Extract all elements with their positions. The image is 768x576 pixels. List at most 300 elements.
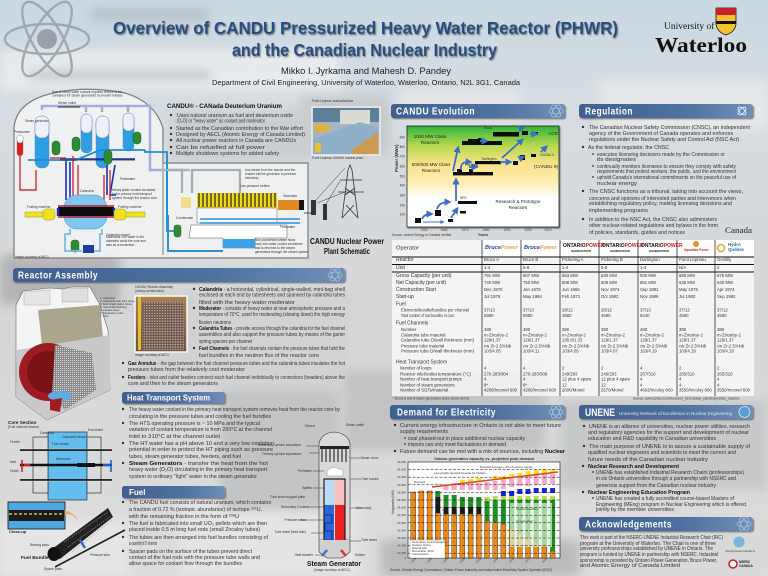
table: reactor comparison: Source: www.cameco.com/uranium_101/nuclear_electricity/candu_reactors xyxy=(633,396,740,400)
schematic callouts xyxy=(14,101,157,259)
chart region labels: ACR xyxy=(548,131,559,136)
chart: CANDU evolution: CANDU 6 xyxy=(540,153,554,157)
text block: reactor components: Moderator - consists of heavy water at near atmospheric pressure and a xyxy=(199,306,345,312)
column values: 103/4.05 xyxy=(562,348,579,354)
text block: heat transport: tubes, steam generator tubes, feeders, and fuel xyxy=(129,454,241,460)
axis labels: 700 xyxy=(400,154,405,158)
text block: Regulation: agency of the Government of Canada operates and enforces xyxy=(589,131,733,137)
column values: 37/13 xyxy=(523,308,534,312)
text block: fuel: allow space for coolant flow through the bundles xyxy=(129,561,242,567)
column values: 2 xyxy=(601,366,604,370)
column values: 103/4.07 xyxy=(601,348,618,354)
heading: Heat Transport System xyxy=(122,392,225,404)
row labels: Pressure tube D/wall thickness (mm) xyxy=(401,348,475,354)
text block: Regulation: executes licensing decisions made by the Commission or xyxy=(597,152,725,158)
chart region labels: (CANDU 9) xyxy=(534,164,559,170)
column values: 249/293 xyxy=(562,372,578,376)
diagram: steam generator: Tube sheet support plate xyxy=(270,495,305,499)
column values: cw Zr-2.5%Nb xyxy=(523,344,551,348)
row labels: Gross Capacity (per unit) xyxy=(396,273,452,279)
column values: 4 xyxy=(640,376,643,382)
caption: steam generator: (Image courtesy of AECL) xyxy=(314,568,350,572)
turbine hall: Non-condensed steam flows xyxy=(255,238,296,242)
demand axis: 34,000 xyxy=(397,468,406,472)
column values: 390 xyxy=(562,327,570,332)
text block: acknowledgements: sponsorship is provided by Ontario Power Generation, Bruce Power, xyxy=(580,558,717,564)
operator logos: GENERATION xyxy=(571,249,591,253)
row labels: Fuel xyxy=(396,302,406,308)
column values: Point Lepreau xyxy=(679,257,706,262)
logo: NSERC: CANADA xyxy=(739,564,754,568)
table: reactor comparison xyxy=(392,240,754,400)
text block: heat transport: The heavy water coolant in the primary heat transport system removes heat from the reactor core by xyxy=(129,407,340,413)
schematic callouts: Image courtesy of AECL xyxy=(15,255,50,259)
heading: Heat Transport System: Heat Transport System xyxy=(127,394,210,402)
schematic callouts: Moderator: the water in the xyxy=(106,235,144,239)
text block: reactor components: spring spacers per channel xyxy=(199,339,252,345)
text block: UNENE: future needs of the Canadian nuclear industry xyxy=(588,457,708,463)
column values: 129/1.37 xyxy=(601,338,618,342)
column values: Sep 1982 xyxy=(717,294,736,299)
x axis: 1950 xyxy=(420,228,428,232)
text block: acknowledgements: This work is part of the NSERC-UNENE Industrial Research Chair (IRC) xyxy=(580,535,723,541)
column values: 935 MW xyxy=(640,273,657,278)
heading: Demand for Electricity: Demand for Electricity xyxy=(397,408,496,418)
column values: 907 MW xyxy=(523,273,540,278)
year labels: 2005 xyxy=(426,556,433,564)
column values: Feb 1971 xyxy=(562,294,581,299)
column values: 4 xyxy=(717,382,720,388)
column values: 2 xyxy=(717,265,720,270)
title: and the Canadian Nuclear Industry xyxy=(232,40,497,60)
schematic callouts: to the primary heat transport xyxy=(112,192,152,196)
chart: CANDU evolution: Power (MWe) xyxy=(394,144,399,172)
operator logos: Aqualitas Power xyxy=(684,248,710,252)
text block: fuel: contact of the fuel rods with the pressure tube walls and xyxy=(129,555,260,561)
row labels xyxy=(396,246,475,392)
text block: demand: coal phased-out in place additional nuclear capacity xyxy=(408,436,525,442)
column values: 480 xyxy=(523,327,531,332)
column values: 5980 xyxy=(484,313,494,318)
illustration: reactor cutaway xyxy=(16,287,135,420)
heading: Demand for Electricity xyxy=(390,404,565,420)
column values: May 1975 xyxy=(679,287,698,292)
row labels: Number of SGTs/material xyxy=(400,388,448,392)
text block: UNENE: Nuclear Research and Development xyxy=(588,464,679,470)
column values: 1-4 xyxy=(562,265,569,270)
column values: 1-4 xyxy=(484,265,491,270)
text block: reactor components: fission neutrons xyxy=(199,320,231,326)
text block: CANDU intro: Designed by AECL (Atomic Energy of Canada Limited) xyxy=(176,132,305,138)
text block: reactor components: assemblies and also support the pressure tubes by means of the garter xyxy=(199,332,345,338)
text block: Regulation: In addition to the NSC Act, the CNSC also administers xyxy=(589,217,717,223)
text block: fuel: The CANDU fuel consists of natural uranium, which contains xyxy=(129,500,271,506)
column values: 4680 xyxy=(601,313,611,318)
photo: turbine hall xyxy=(312,99,380,160)
chart: CANDU evolution: Bruce xyxy=(484,126,493,130)
plant schematic title: CANDU Nuclear Power xyxy=(310,237,384,246)
diagram: steam generator: Secondary Coolant xyxy=(281,505,308,509)
column values: 129/1.37 xyxy=(523,338,540,342)
column values xyxy=(484,257,751,392)
diagram: steam generator: Shroud xyxy=(305,424,315,428)
logo: University of Waterloo: Waterloo xyxy=(655,33,747,57)
diagram: core section: Core Section xyxy=(8,420,37,425)
text block: UNENE: Nuclear Engineering Education Program xyxy=(588,490,690,496)
text block: heat transport xyxy=(122,407,340,480)
text block: heat transport: heavy water (D₂O) circulating in the primary heat transport xyxy=(129,467,267,473)
diagram: steam generator: Secondary xyxy=(356,506,372,510)
logo: University of Waterloo: University of xyxy=(664,21,715,32)
text block: UNENE: The main purpose of UNENE is to assure a sustainable supply of xyxy=(589,444,751,450)
text block: Regulation: continually monitors licensees to ensure they comply with safety xyxy=(597,164,736,170)
chart: CANDU evolution: NPD xyxy=(460,196,467,200)
text block: reactor components: fuel bundles in the neutron flux of the reactor core xyxy=(199,353,319,359)
text block: acknowledgements: university professorships established by UNENE in Ontario. The xyxy=(580,546,713,552)
row labels: Construction Start xyxy=(396,287,437,293)
schematic callouts: Steam outlet xyxy=(58,101,76,105)
axis labels: 100 xyxy=(400,212,405,216)
legend: Generation Source/Capacity xyxy=(412,540,448,544)
fuelling machines xyxy=(25,209,145,220)
text block: demand: Current energy infrastructure in Ontario is not able to meet future xyxy=(400,423,561,429)
schematic callouts: Fueling machine xyxy=(118,205,142,209)
x axis: 1980 xyxy=(482,228,490,232)
chart: CANDU evolution xyxy=(392,126,559,237)
text block: acknowledgements: program is funded by UNENE in partnership with NSERC. Industrial xyxy=(580,552,718,558)
logo: NSERC xyxy=(729,560,754,568)
turbine hall: Condensate xyxy=(176,216,193,220)
gridlines xyxy=(408,470,560,553)
year labels: 2019 xyxy=(541,556,548,564)
photo: turbine hall: Point Lepreau CANDU nuclear plant xyxy=(312,156,363,160)
turbine hall: Use steam from the reactor and the xyxy=(245,168,295,172)
chart: CANDU evolution: Pickering xyxy=(465,163,478,167)
column values: 129/1.37 xyxy=(640,338,657,342)
turbine hall: and is returned to the steam xyxy=(255,246,295,250)
column values: cw Zr-2.5%Nb xyxy=(601,344,629,348)
illustration: reactor cutaway: 5. Feeder pipes xyxy=(100,308,120,312)
text block: fuel: Spacer pads on the surface of the tubes prevent direct xyxy=(129,549,252,555)
text block: heat transport: The HT water has a pH above 10 and a very low oxidation xyxy=(129,441,274,447)
chart: Ontario demand and capacity: Ontario generation capacity vs. projected peak demand xyxy=(434,457,535,461)
diagram: steam generator: Heat transfer xyxy=(295,553,314,557)
column values: 103/4.05 xyxy=(484,348,501,354)
diagram: core section: Calandria xyxy=(40,431,54,435)
text block: heat transport: inlet to 310°C at the channel outlet xyxy=(129,434,221,440)
column values: 380 xyxy=(679,327,687,332)
diagram: steam generator: Pressure tubes xyxy=(285,518,306,522)
transformer xyxy=(311,200,327,220)
heading: UNENE: UNENE xyxy=(585,407,615,419)
column values: Jan 1978 xyxy=(523,287,541,292)
column values: 380 xyxy=(717,327,725,332)
row labels: Elements/bundle/bundles per channel xyxy=(401,308,469,312)
column values: 103/4.11 xyxy=(523,348,540,354)
text block: CANDU intro: Started as the Canadian contribution to the War effort xyxy=(176,126,303,132)
column values: 12 plus 4 spare xyxy=(562,376,592,382)
chart annotations: Demand forecast + 1% of reserve margin xyxy=(480,465,533,469)
text block: UNENE xyxy=(582,424,751,513)
legend: Nuclear, Hydro xyxy=(412,543,431,547)
text block: UNENE: UNENE has established Industrial Research Chairs (professorships) xyxy=(596,470,744,476)
text block: fuel: an assembly of 37 elements xyxy=(129,541,157,547)
axis labels: 800 xyxy=(400,145,405,149)
text block: reactor components: Feeders - inlet and outlet feeders connect each fuel channel individually to connectors (headers) above the xyxy=(128,375,345,381)
authors: Mikko I. Jyrkama and Mahesh D. Pandey xyxy=(281,66,452,76)
column values: 635 MW xyxy=(679,280,696,285)
turbine hall: back into water-cooled condenser xyxy=(255,242,304,246)
column values: 37/13 xyxy=(484,308,495,312)
text block: reactor components: filled with the heavy water moderator xyxy=(199,300,295,306)
x axis xyxy=(420,228,552,237)
schematic callouts: Pressurizer xyxy=(14,130,31,134)
operator logos: ONTARIOPOWER xyxy=(602,243,644,249)
column values: 791 MW xyxy=(484,273,501,278)
column values: Jun 1966 xyxy=(562,287,580,292)
column values: 750 MW xyxy=(523,280,540,285)
axis labels: 900 xyxy=(400,136,405,140)
heading: Acknowledgements xyxy=(579,516,753,532)
text block: reactor components: pressure tubes from the relatively cool moderator xyxy=(128,367,245,373)
caption: steam generator: Steam Generator xyxy=(307,561,361,568)
operator logos: ONTARIOPOWER xyxy=(563,243,605,249)
schematic callouts: Heavy water coolant circulates xyxy=(112,188,156,192)
row labels: Total number of fuel bundles in core xyxy=(401,313,454,318)
text block: acknowledgements xyxy=(580,535,723,569)
column values: 130.8/1.33 xyxy=(562,338,583,342)
demand axis: 28,000 xyxy=(397,490,406,494)
demand axis: 26,000 xyxy=(397,498,406,502)
demand axis: 20,000 xyxy=(397,521,406,525)
column values: 4560 xyxy=(679,313,689,318)
illustration: reactor cutaway: 1. Calandria xyxy=(100,296,116,300)
heading: Reactor Assembly: Reactor Assembly xyxy=(18,270,98,282)
column values: 12 xyxy=(562,382,567,388)
text block: reactor components: Calandria Tubes - provide access through the calandria for the fuel channel xyxy=(199,326,345,332)
text block: demand: Future demand can be met with a mix of sources, including Nuclear xyxy=(400,449,566,455)
evolution arrows xyxy=(422,128,546,222)
axis labels: 500 xyxy=(400,174,405,178)
schematic callouts: Feedwater xyxy=(120,177,136,181)
column values: Jul 1982 xyxy=(679,294,696,299)
turbine hall: reactor turbine generator to produce xyxy=(245,172,296,176)
column values: Jul 1978 xyxy=(484,294,501,299)
chart region labels: Reactors xyxy=(422,168,441,173)
column values: N/A xyxy=(679,265,686,270)
column values: 508 MW xyxy=(562,280,579,285)
diagram: core section: Calandria Vessel xyxy=(62,435,86,439)
illustration: reactor cutaway: 6. Moderator outlet xyxy=(100,311,124,315)
text block: reactor components: Fuel Channels - the fuel channels contain the pressure tubes that hold the xyxy=(199,346,345,352)
diagram: steam generator: Baffles xyxy=(302,486,312,490)
plant schematic title xyxy=(310,237,384,256)
text block: UNENE: UNENE is an alliance of universities, nuclear power utilities, research xyxy=(589,424,750,430)
calandria xyxy=(64,195,107,229)
column values: 12 xyxy=(601,382,606,388)
text block: Regulation: uphold Canada's international commitments on the peaceful use of xyxy=(597,175,736,181)
column values: cw Zr-2.5%Nb xyxy=(679,344,707,348)
photo: calandria face: CANDU Reactor Assembly xyxy=(135,285,173,289)
column values: 4 xyxy=(640,366,643,370)
text block: CANDU intro: Multiple shutdown systems for added safety xyxy=(176,151,279,157)
column values: 4680 xyxy=(562,313,572,318)
text block: reactor components xyxy=(122,287,345,387)
text block: fuel: The fuel is fabricated into small UO₂ pellets which are then xyxy=(129,521,267,527)
column values: 4200/Inconel 600 xyxy=(484,388,518,392)
schematic callouts: Calandria vessel xyxy=(106,233,130,237)
column values: Bruce A xyxy=(484,257,499,262)
column values: m-Zircaloy-2 xyxy=(640,332,664,338)
logo: Canada wordmark: Canada xyxy=(725,225,752,235)
column values: 6240 xyxy=(640,313,650,318)
column values: 265/310 xyxy=(717,372,733,376)
text block: Regulation: implementing programs xyxy=(589,208,648,214)
column values: 2570/Monel xyxy=(601,388,624,392)
text block: reactor components: core and then to the steam generators xyxy=(128,381,218,387)
column values: Sep 1981 xyxy=(640,287,659,292)
text block: Regulation: other nuclear-related regulations and bylaws in the form xyxy=(589,223,718,229)
diagram: core section: (Fuel channel reactor) xyxy=(8,425,39,429)
column values: Nov 1989 xyxy=(640,294,659,299)
illustration: fuel bundle: Pressure tube xyxy=(90,553,110,557)
demand axis: 30,000 xyxy=(397,483,406,487)
schematic callouts: acts as a moderator. xyxy=(106,243,135,247)
text block: reactor components: enclosed at each end by tubesheets and spanned by calandria tubes xyxy=(199,292,345,298)
text block: reactor components: Calandria - a horizontal, cylindrical, single-walled, mini-bag shell xyxy=(199,287,345,293)
logo: UNENE xyxy=(725,536,755,553)
text block: heat transport: system to ordinary "light" water in the steam generator xyxy=(129,474,257,480)
row labels: Number of heat transport pumps xyxy=(400,376,462,382)
column values: 28/12 xyxy=(562,308,573,312)
chart: Ontario demand and capacity xyxy=(390,457,560,572)
year labels: 2017 xyxy=(524,556,531,564)
column values: 563 MW xyxy=(562,273,579,278)
illustration: fuel bundle: Spacer pads xyxy=(44,567,62,571)
column values: 4 xyxy=(679,382,682,388)
axis labels xyxy=(400,136,405,216)
column values: 4560 xyxy=(717,313,727,318)
column values: 249/293 xyxy=(601,372,617,376)
diagram: steam generator: Tube sheet (feed side) xyxy=(274,530,306,534)
demand axis: 16,000 xyxy=(397,536,406,540)
column values: m-Zircaloy-2 xyxy=(523,332,547,338)
axis labels: 400 xyxy=(400,184,405,188)
column values: 480 xyxy=(640,327,648,332)
plant schematic title: Plant Schematic xyxy=(324,247,370,256)
demand line xyxy=(432,472,558,487)
diagram: core section: Outlet xyxy=(10,469,19,473)
column values: 270-283/304 xyxy=(484,372,509,376)
demand axis: 18,000 xyxy=(397,528,406,532)
x axis: 1990 xyxy=(503,228,511,232)
chart: CANDU evolution: Darlington xyxy=(482,157,497,161)
row labels: Heat Transport System xyxy=(396,360,447,366)
row labels: Unit xyxy=(396,265,406,271)
chart: CANDU evolution: Source: Atomic Energy of Canada Limited xyxy=(392,233,451,237)
column values: 2 xyxy=(717,366,720,370)
turbine hall: generators through the closed system xyxy=(255,250,309,254)
chart annotations xyxy=(414,465,539,523)
turbine hall: electricity. xyxy=(245,176,259,180)
column values: 129/1.37 xyxy=(679,338,696,342)
demand axis: 0 xyxy=(404,556,406,560)
diagram: steam generator xyxy=(258,423,379,558)
text block: UNENE: education and R&D capability in Canadian universities xyxy=(588,436,716,442)
containment and turbine hall outline xyxy=(14,89,308,258)
pumps xyxy=(52,132,141,252)
demand axis xyxy=(397,460,406,560)
column values: m-Zircaloy-2 xyxy=(562,332,586,338)
column values: 4663/Incoloy 800 xyxy=(640,388,673,392)
text block: Regulation: As the federal regulator, the CNSC xyxy=(588,145,669,151)
column values: 103/4.19 xyxy=(717,348,734,354)
column values: 508 MW xyxy=(601,280,618,285)
column values: 267/310 xyxy=(640,372,656,376)
affiliation: Department of Civil Engineering, University of Waterloo, Waterloo, Ontario, N2L 3G1, Canada xyxy=(212,78,521,87)
column values: m-Zircaloy-2 xyxy=(717,332,741,338)
column values: 5-8 xyxy=(523,265,530,270)
column values: m-Zircaloy-2 xyxy=(679,332,703,338)
column values: 37/13 xyxy=(640,308,651,312)
text block: heat transport: Steam Generators - transfer the heat from the hot xyxy=(129,461,269,467)
chart region labels xyxy=(412,131,559,210)
column values: 3550/Inconel 600 xyxy=(717,388,751,392)
text block: Regulation: regulations under the Nuclear Safety and Control Act (NSC Act) xyxy=(589,137,739,143)
chart annotations: Gas/Renewables xyxy=(516,507,539,511)
caption: steam generator xyxy=(307,561,361,572)
photo: calandria face: Image courtesy of AECL xyxy=(135,353,170,357)
chart: Ontario demand and capacity: Source: Ontario Energy Commission, Ontario Power Authority and Independent Electricity System Operator (IESO) xyxy=(390,568,552,572)
row labels: Number xyxy=(401,327,417,332)
column values: 1-4 xyxy=(640,265,647,270)
year labels: 2003 xyxy=(410,556,417,564)
row labels: Net Capacity (per unit) xyxy=(396,280,446,286)
illustration: fuel bundle: Bearing pads xyxy=(30,543,49,547)
column values: cw Zr-2.5%Nb xyxy=(562,344,590,348)
diagram: close-up xyxy=(8,502,78,534)
heading: UNENE xyxy=(579,405,753,419)
title xyxy=(113,18,618,60)
operator logos: BrucePower xyxy=(485,245,518,251)
column values: 37/12 xyxy=(679,308,690,312)
chart annotations: Demand xyxy=(414,480,425,484)
year labels: 2015 xyxy=(508,556,515,564)
text block: fuel: placed inside 0.5 m long fuel rods (small Zircaloy tubes) xyxy=(129,527,260,533)
text block: Regulation: its designates xyxy=(597,157,636,163)
column values: 2 xyxy=(679,366,682,370)
text block: reactor components: Gas Annulus - the gap between the fuel channel pressure tubes and the calandria tubes insulates the hot xyxy=(128,361,345,367)
illustration: fuel bundle xyxy=(21,508,125,571)
text block: heat transport: variation of coolant temperature is from 260°C at the channel xyxy=(129,427,272,433)
column values: Nov 1974 xyxy=(601,287,620,292)
icon: atom watermark xyxy=(5,0,89,83)
column values: Pickering B xyxy=(601,257,623,262)
row labels: Start-up xyxy=(396,294,414,300)
operator logos: BrucePower xyxy=(524,245,557,251)
text block: UNENE: jointly by the member universities xyxy=(595,507,674,513)
text block: Regulation: requirements that protect workers, the public, and the environment xyxy=(597,169,736,175)
column values: 740 MW xyxy=(484,280,501,285)
chart region labels: 500/600 MW Class xyxy=(412,162,451,167)
column values: 103/4.19 xyxy=(640,348,657,354)
column values: 129/1.37 xyxy=(484,338,501,342)
pressurizer xyxy=(17,135,23,156)
diagram: steam generator: Secondary cyclone separators xyxy=(258,443,301,447)
heading: UNENE: University Network of Excellence in Nuclear Engineering xyxy=(619,411,732,416)
text block: CANDU intro: CANDU® - CANada Deuterium Uranium xyxy=(167,103,282,110)
diagram: steam generator: Primary cyclone separators xyxy=(262,452,301,456)
